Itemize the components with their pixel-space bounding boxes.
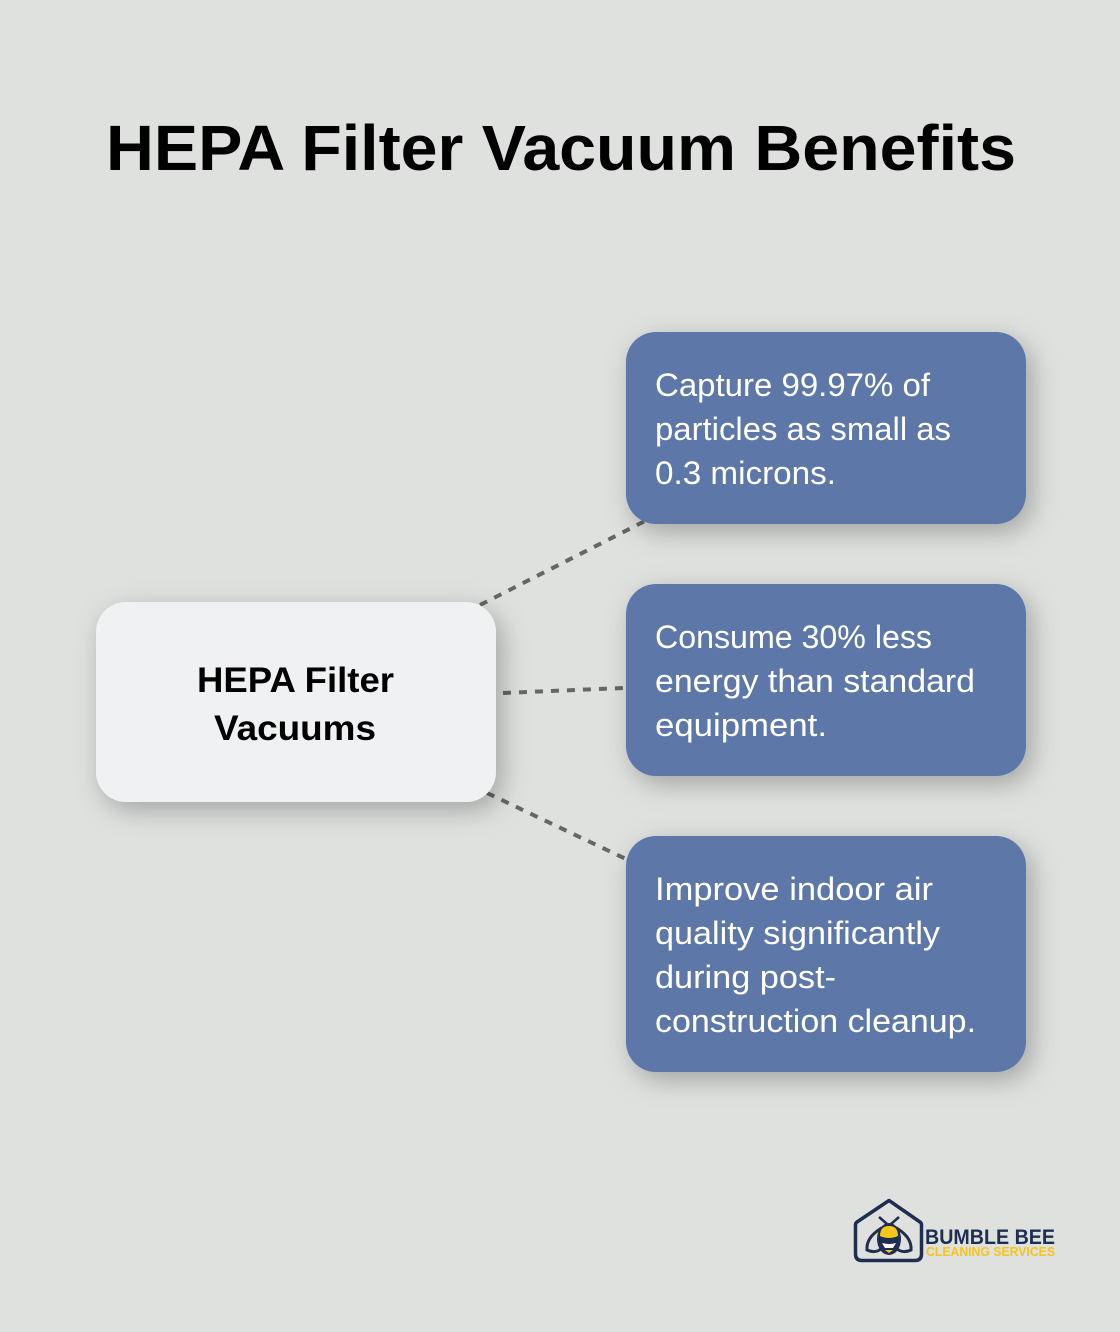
connector: middle benefit bbox=[503, 688, 623, 693]
panel: HEPA Filter Vacuums: HEPA Filter bbox=[197, 661, 394, 700]
logo: Bumble Bee Cleaning Services bbox=[856, 1200, 1055, 1260]
panel: energy benefit bbox=[626, 584, 1026, 776]
logo: Bumble Bee Cleaning Services: CLEANING SERVICES bbox=[926, 1245, 1055, 1259]
panel: air quality benefit: during post- bbox=[655, 959, 836, 995]
panel: air quality benefit: quality significantly bbox=[655, 915, 940, 951]
icon: house outline bbox=[856, 1200, 922, 1260]
connector: bottom benefit bbox=[487, 793, 628, 860]
panel: energy benefit: energy than standard bbox=[655, 663, 975, 699]
panel: HEPA Filter Vacuums bbox=[96, 602, 496, 802]
logo: Bumble Bee Cleaning Services: BUMBLE BEE bbox=[925, 1226, 1055, 1249]
panel: air quality benefit bbox=[626, 836, 1026, 1072]
connector: top benefit bbox=[480, 521, 645, 605]
panel: air quality benefit: construction cleanup. bbox=[655, 1003, 976, 1039]
panel: energy benefit: Consume 30% less bbox=[655, 619, 932, 655]
panel: air quality benefit: Improve indoor air bbox=[655, 871, 933, 907]
panel: capture benefit bbox=[626, 332, 1026, 524]
title: HEPA Filter Vacuum Benefits bbox=[106, 112, 1016, 184]
panel: capture benefit: particles as small as bbox=[655, 411, 951, 447]
panel: energy benefit: equipment. bbox=[655, 707, 827, 743]
panel: capture benefit: Capture 99.97% of bbox=[655, 367, 930, 403]
panel: HEPA Filter Vacuums: Vacuums bbox=[214, 709, 376, 748]
icon: bee bbox=[867, 1217, 911, 1255]
panel: capture benefit: 0.3 microns. bbox=[655, 455, 836, 491]
